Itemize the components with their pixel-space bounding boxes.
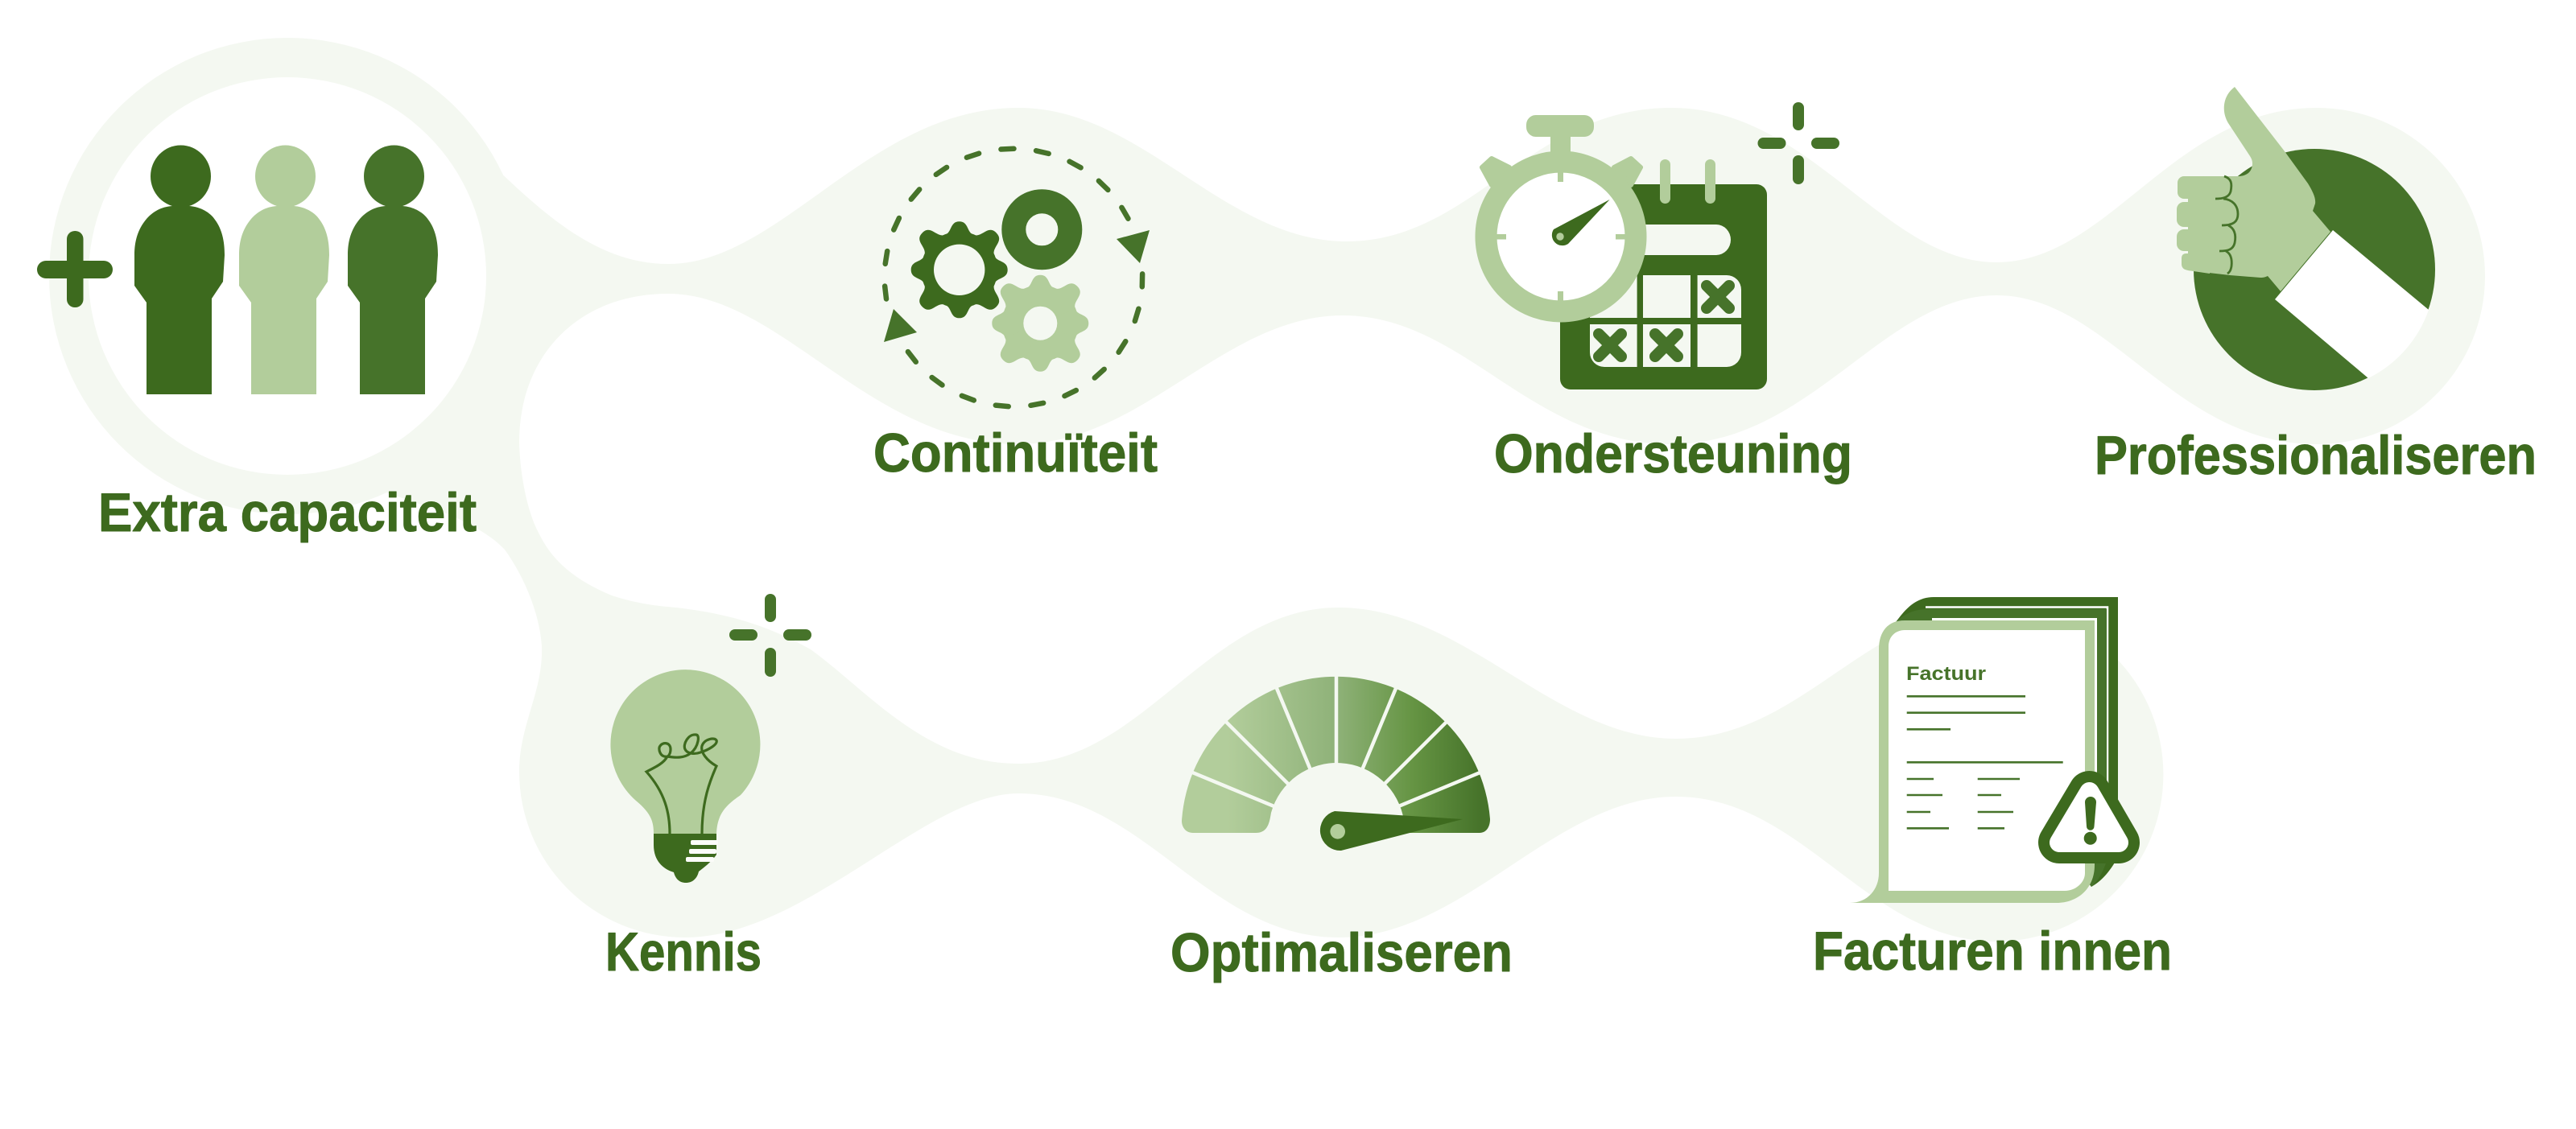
heading: Kennis: Kennis: [605, 921, 762, 983]
front sheet: [1850, 620, 2095, 903]
person light: [239, 145, 329, 394]
gauge needle: [1320, 811, 1463, 851]
person medium: [348, 145, 438, 394]
sheet paper: [1889, 630, 2085, 891]
bulb glass: [610, 670, 760, 834]
dark disc: [2194, 149, 2435, 390]
white inner circle: [89, 77, 486, 475]
ring gear: [1013, 201, 1070, 258]
icon: light bulb: [610, 670, 760, 883]
arrow: cycle right: [1117, 230, 1150, 263]
icon: gears in cycle: [884, 149, 1150, 406]
stopwatch needle: [1552, 200, 1610, 245]
hand: [2188, 87, 2330, 291]
back sheet gap: [1926, 607, 2107, 845]
icon: speed gauge: [1182, 671, 1490, 851]
dark gear: [911, 221, 1008, 318]
icon: plus sign: [37, 231, 113, 307]
light gear: [992, 275, 1088, 372]
heading: Ondersteuning: Ondersteuning: [1494, 423, 1852, 484]
invoice lines: [1907, 696, 2063, 828]
icon: sparkle bottom: [729, 594, 811, 677]
middle sheet: [1896, 609, 2107, 887]
icon: three people: [134, 145, 438, 394]
bulb base: [654, 834, 716, 883]
icon: sparkle top: [1758, 102, 1839, 184]
gauge arc: [1182, 677, 1490, 833]
heading: Optimaliseren: Optimaliseren: [1170, 922, 1513, 983]
person dark: [134, 145, 225, 394]
icon: thumbs up: [2177, 87, 2435, 390]
filament: [646, 735, 716, 834]
finger outlines: [2215, 176, 2238, 274]
icon: calendar with stopwatch: [1482, 115, 1767, 389]
heading: Continuïteit: Continuïteit: [873, 422, 1158, 484]
stopwatch crown: [1482, 115, 1641, 185]
icon: invoice with warning: [1850, 597, 2119, 903]
heading: Professionaliseren: Professionaliseren: [2095, 425, 2537, 486]
calendar body: [1560, 184, 1767, 389]
calendar header bar: [1602, 225, 1731, 255]
dashed cycle ring: [885, 149, 1142, 406]
heading: Facturen innen: Facturen innen: [1813, 921, 2172, 982]
stopwatch face: [1486, 162, 1636, 311]
fingers: [2177, 176, 2210, 274]
warning triangle: [2059, 792, 2119, 845]
text: Factuur: Factuur: [1906, 663, 1986, 685]
white sleeve band: [2275, 230, 2429, 378]
middle sheet gap: [1932, 620, 2096, 853]
calendar rings: [1660, 159, 1715, 204]
back sheet: [1896, 597, 2118, 887]
background path blob: [49, 38, 2485, 942]
stopwatch ticks: [1496, 172, 1625, 301]
calendar crosses: [1599, 286, 1729, 356]
gauge dividers: [1187, 671, 1485, 808]
arrow: cycle left: [884, 309, 917, 342]
base stripes: [686, 840, 718, 862]
heading: Extra capaciteit: Extra capaciteit: [98, 482, 477, 543]
calendar grid: [1590, 275, 1741, 367]
